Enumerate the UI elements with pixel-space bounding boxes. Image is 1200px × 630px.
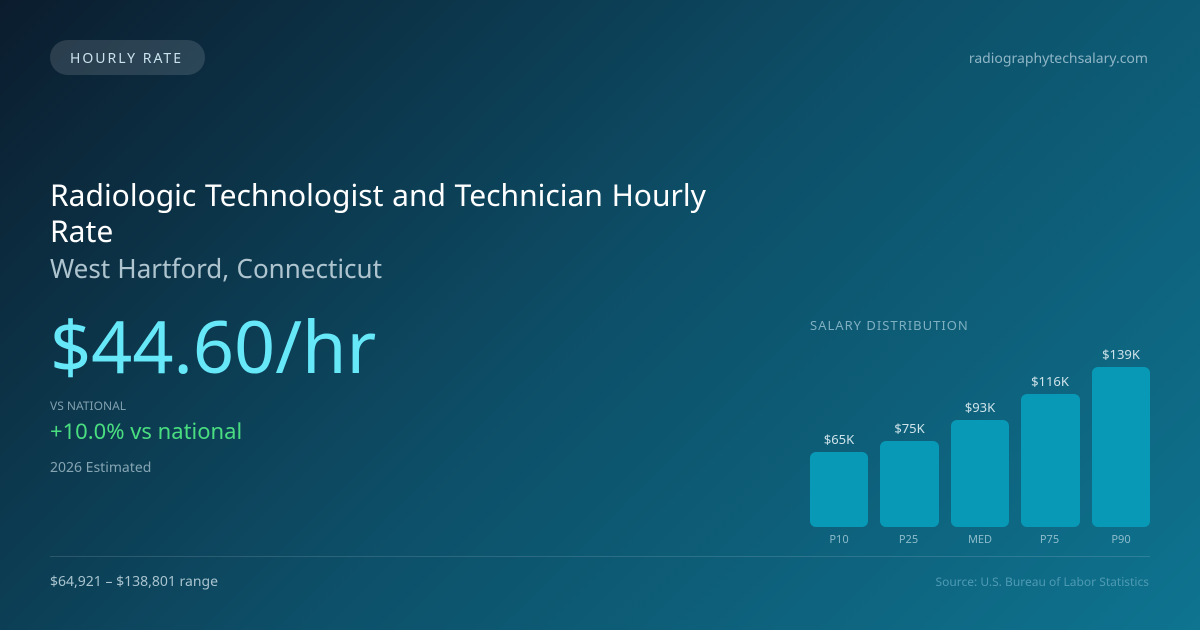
bar P10 xyxy=(810,430,868,547)
bar P10: $65K xyxy=(824,430,854,448)
bar MED xyxy=(951,398,1009,547)
bar P25: $75K xyxy=(894,419,925,437)
headline value: $44.60/hr xyxy=(50,297,376,395)
bar P25: P25 xyxy=(899,532,918,547)
chart: salary distribution xyxy=(810,316,1150,547)
bar MED: MED xyxy=(968,532,992,547)
title: Radiologic Technologist and Technician Hourly Rate xyxy=(50,174,706,251)
vs national label: VS NATIONAL xyxy=(50,397,126,414)
bar P75: $116K xyxy=(1031,372,1069,390)
subtitle: location: West Hartford, Connecticut xyxy=(50,250,382,286)
bar P25 xyxy=(880,419,939,547)
bar P75 xyxy=(1021,372,1080,547)
bar P10: P10 xyxy=(829,532,849,547)
source: Source: U.S. Bureau of Labor Statistics xyxy=(936,573,1149,590)
bar P90 xyxy=(1092,345,1150,547)
salary range: $64,921 – $138,801 range xyxy=(50,572,218,591)
year note: 2026 Estimated xyxy=(50,458,151,477)
chart heading: SALARY DISTRIBUTION xyxy=(810,316,969,334)
bar P90: $139K xyxy=(1102,345,1140,363)
badge: hourly rate xyxy=(50,40,205,75)
bar P75: P75 xyxy=(1040,532,1059,547)
badge: hourly rate: HOURLY RATE xyxy=(70,49,183,68)
vs national value: +10.0% vs national xyxy=(50,416,242,446)
bar P90: P90 xyxy=(1111,532,1131,547)
site url: radiographytechsalary.com xyxy=(969,49,1148,68)
bar MED: $93K xyxy=(965,398,995,416)
